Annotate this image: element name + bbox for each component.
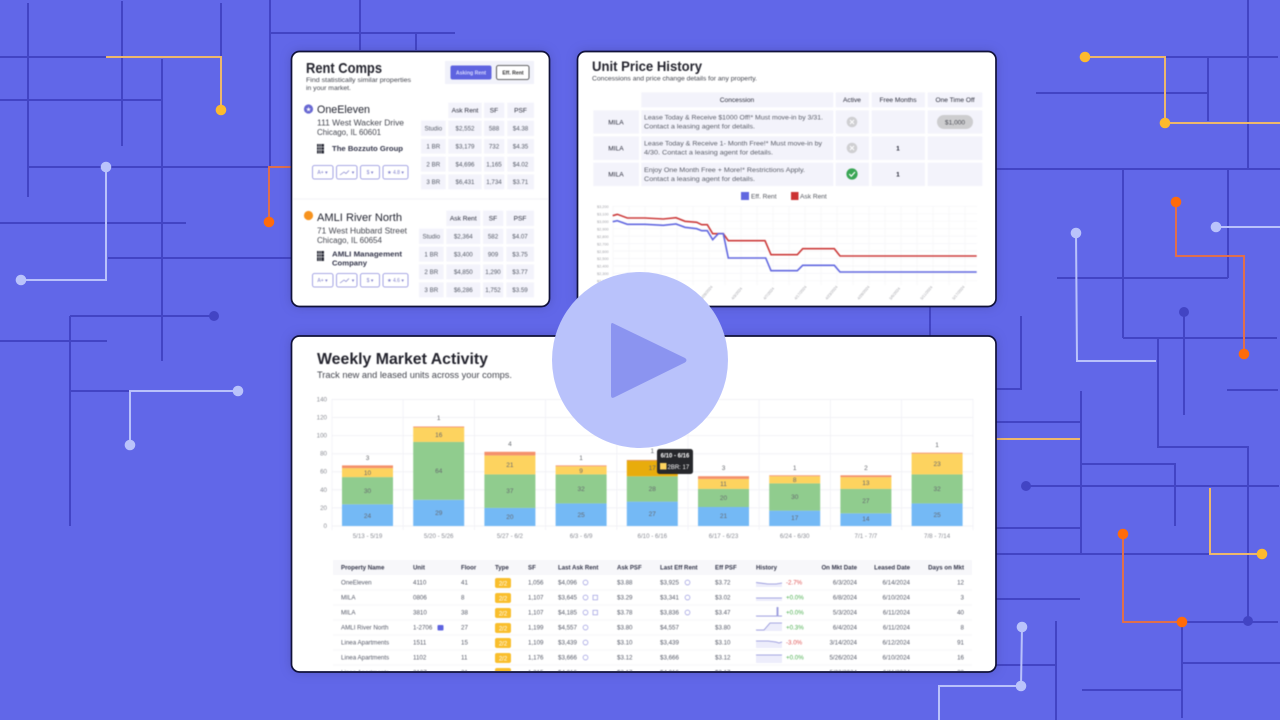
- table: concessions: Active: [843, 97, 861, 104]
- property: AMLI River North: $ ▾: [367, 278, 374, 284]
- yellow connector: top left: [106, 57, 226, 115]
- table header row: Type: [495, 564, 509, 572]
- table header row: Leased Date: [874, 564, 911, 572]
- property: AMLI River North: Chicago, IL 60654: [317, 236, 383, 245]
- bar value labels: 23: [933, 461, 941, 468]
- line chart: rent history: 4/3/2024: [731, 287, 743, 301]
- chart tooltip: [657, 449, 693, 474]
- stacked bar chart: weekly units: 120: [317, 414, 328, 422]
- table row text: $3,645: [558, 594, 577, 602]
- table row text: $4,185: [558, 610, 577, 616]
- bar value labels: 2: [864, 465, 868, 472]
- table row text: -2.7%: [786, 580, 803, 586]
- table row text: [341, 580, 965, 676]
- line chart: rent history: $2,800: [597, 235, 609, 239]
- table row text: 1102: [413, 654, 427, 662]
- table header row: On Mkt Date: [821, 564, 858, 572]
- table: OneEleven rents: 732: [489, 144, 500, 150]
- heading: weekly market activity: Weekly Market Activity: [317, 351, 488, 368]
- table row text: 0806: [413, 594, 427, 602]
- x axis week labels: 6/17 - 6/23: [709, 533, 739, 540]
- table type pills: [495, 578, 511, 678]
- chart legend: Eff. Rent: [751, 194, 777, 200]
- bar value labels: 32: [577, 486, 585, 493]
- table: concessions: Enjoy One Month Free + More!* Restrictions Apply.: [644, 167, 805, 174]
- table row text: $3,341: [660, 594, 679, 602]
- table: concessions: 4/30. Contact a leasing agent for details.: [644, 150, 773, 156]
- table: OneEleven rents: $4.38: [513, 126, 529, 132]
- table: concessions: MILA: [608, 146, 624, 152]
- line chart: rent history: $3,100: [597, 212, 609, 216]
- table row text: 91: [957, 640, 965, 646]
- light connector: bottom right: [939, 622, 1027, 720]
- bar value labels: 9: [579, 468, 583, 475]
- property: OneEleven: ★: [306, 105, 312, 113]
- table row text: Linea Apartments: [341, 670, 389, 676]
- stacked bar chart: weekly units: 80: [320, 451, 328, 458]
- table row text: $3,666: [660, 654, 679, 662]
- table type pill labels: 2/2: [499, 642, 508, 648]
- table: concessions: MILA: [608, 120, 624, 126]
- x axis week labels: 5/20 - 5/26: [424, 533, 454, 540]
- table: OneEleven rents: $3,179: [456, 144, 475, 150]
- table: OneEleven rents: SF: [490, 108, 498, 114]
- table: concessions: 1: [896, 146, 900, 152]
- table history icons: [583, 580, 690, 660]
- text: rent comps subtitle: in your market.: [306, 85, 351, 92]
- table: OneEleven rents: 1 BR: [426, 144, 441, 150]
- table row text: 40: [957, 610, 965, 616]
- x axis week labels: 7/1 - 7/7: [855, 533, 878, 540]
- table row text: 1,315: [528, 670, 544, 676]
- line chart: rent history: 5/6/2024: [889, 287, 901, 301]
- x axis week labels: 7/8 - 7/14: [924, 533, 951, 540]
- table: OneEleven rents: PSF: [514, 108, 527, 114]
- orange connector: left: [264, 167, 292, 227]
- line chart: rent history: $2,700: [597, 242, 609, 246]
- table row text: 3810: [413, 610, 427, 616]
- table: AMLI rents: 3 BR: [424, 287, 439, 294]
- line chart: rent history: $2,400: [597, 264, 609, 268]
- bar value labels: 28: [649, 486, 656, 493]
- property: OneEleven: $ ▾: [367, 170, 374, 176]
- table header row: Last Eff Rent: [660, 564, 698, 572]
- table row text: $3.12: [617, 654, 633, 662]
- line chart: rent history: $2,500: [597, 257, 609, 261]
- table row text: 8: [461, 594, 465, 602]
- table: concessions: Free Months: [879, 97, 917, 104]
- table: OneEleven rents: 3 BR: [426, 179, 441, 186]
- yellow connector: top right: [1080, 52, 1280, 128]
- table: OneEleven rents: $4.02: [513, 162, 529, 168]
- line chart: rent history: 4/17/2024: [794, 285, 808, 301]
- table row text: 1511: [413, 640, 427, 646]
- table: OneEleven rents: 2 BR: [426, 162, 441, 168]
- table type pill labels: 2/2: [499, 626, 508, 632]
- line chart: rent history: $3,000: [597, 220, 609, 224]
- property: OneEleven: [304, 104, 408, 179]
- table: OneEleven rents: $4,696: [456, 162, 475, 168]
- table row text: AMLI River North: [341, 624, 389, 632]
- table: leased units: [340, 564, 965, 671]
- heading: rent comps: Rent Comps: [306, 60, 382, 77]
- table header row: [341, 564, 964, 572]
- table: AMLI rents: Ask Rent: [450, 216, 477, 222]
- panel: unit price history: [578, 52, 996, 306]
- table header row: Property Name: [341, 564, 385, 572]
- bar value labels: 3: [366, 455, 370, 462]
- bar value labels: [364, 415, 941, 523]
- table row text: 1,176: [528, 654, 544, 662]
- table: AMLI rents: $3.77: [512, 269, 528, 276]
- bar value labels: 29: [435, 510, 443, 517]
- property: OneEleven: A+ ▾: [317, 170, 328, 176]
- table: AMLI rents: $4,850: [454, 269, 473, 276]
- table: AMLI rents: $3,400: [454, 252, 473, 258]
- table header row: Floor: [461, 564, 477, 572]
- bar value labels: 37: [506, 488, 514, 495]
- table row text: 6/10/2024: [882, 594, 911, 602]
- rent toggle buttons: Eff. Rent: [502, 70, 524, 76]
- table row text: 6/12/2024: [882, 640, 911, 646]
- property: OneEleven: ▾: [352, 170, 355, 176]
- table row text: +0.3%: [786, 624, 804, 632]
- table row text: 5/23/2024: [829, 670, 858, 676]
- table: AMLI rents: PSF: [514, 216, 526, 222]
- line chart: rent history: $2,900: [597, 228, 609, 232]
- orange connector: right: [1171, 197, 1249, 359]
- x axis week labels: 5/13 - 5/19: [353, 533, 383, 540]
- bar value labels: 3: [722, 465, 726, 472]
- table row text: 6/11/2024: [883, 610, 911, 616]
- table: concessions: MILA: [608, 172, 624, 178]
- property: AMLI River North: AMLI River North: [317, 212, 402, 224]
- table row text: $3.88: [617, 580, 633, 586]
- table: AMLI rents: $6,286: [454, 287, 473, 294]
- table row text: $4,096: [558, 580, 577, 586]
- yellow stub beside activity panel: [996, 438, 1080, 440]
- chart legend: Ask Rent: [800, 194, 827, 200]
- table row text: 1,107: [528, 610, 544, 616]
- bar value labels: 8: [793, 477, 797, 484]
- table row text: 41: [461, 580, 468, 586]
- table row text: $3.80: [617, 624, 633, 632]
- table row text: 1-2706: [413, 624, 433, 632]
- line chart: rent history: 5/17/2024: [952, 285, 966, 301]
- table row text: $3.29: [617, 594, 633, 602]
- table header row: Unit: [413, 564, 425, 572]
- table row text: +0.0%: [786, 654, 804, 662]
- yellow connector: lower right: [1210, 488, 1267, 559]
- rent toggle buttons: Asking Rent: [456, 70, 486, 76]
- table row text: 27: [461, 624, 468, 632]
- bar value labels: 10: [364, 470, 371, 477]
- table row text: 21: [461, 670, 468, 676]
- bar value labels: 1: [579, 455, 583, 462]
- light connector: right long: [1071, 228, 1156, 361]
- table row text: 6/11/2024: [883, 624, 911, 632]
- line chart: rent history: $2,600: [597, 250, 609, 254]
- orange connector: lower right: [1118, 529, 1187, 627]
- property: AMLI River North: ★ 4.6 ▾: [387, 278, 404, 284]
- table row text: 6/4/2024: [833, 624, 858, 632]
- x axis week labels: 6/24 - 6/30: [780, 533, 810, 540]
- bar value labels: 27: [649, 511, 656, 518]
- property: OneEleven: OneEleven: [317, 104, 370, 116]
- bar value labels: 64: [435, 468, 443, 475]
- bar value labels: 11: [720, 481, 727, 488]
- unit tag icon: [438, 625, 444, 630]
- table type pill labels: 2/2: [499, 596, 508, 602]
- table header row: Days on Mkt: [928, 564, 964, 572]
- table type pill labels: [499, 582, 508, 662]
- bar value labels: 1: [793, 465, 797, 472]
- bar value labels: 32: [933, 486, 941, 493]
- table row text: $4,557: [660, 624, 679, 632]
- table header row: SF: [528, 564, 536, 572]
- table row text: 1,107: [528, 594, 544, 602]
- bar value labels: 30: [364, 488, 371, 495]
- table row text: 2107: [413, 670, 427, 676]
- table row text: 1,199: [528, 624, 544, 632]
- stacked bar chart: weekly units: 140: [317, 396, 328, 404]
- table type pill labels: 2/2: [499, 582, 508, 588]
- table: concessions: Contact a leasing agent for details.: [644, 176, 755, 183]
- chart legend: [741, 192, 827, 200]
- table row text: 15: [461, 640, 468, 646]
- line chart: rent history: 4/7/2024: [763, 287, 775, 301]
- bar value labels: 21: [720, 513, 727, 520]
- table row text: $4,016: [660, 670, 679, 676]
- stacked bar chart: weekly units: 100: [317, 433, 328, 440]
- table type pill labels: 2/2: [499, 612, 508, 618]
- x axis week labels: 5/27 - 6/2: [497, 533, 524, 540]
- table: AMLI rents: 1,752: [485, 287, 501, 294]
- property: OneEleven: ★ 4.8 ▾: [387, 170, 404, 176]
- bar value labels: 1: [650, 448, 654, 455]
- text: weekly market subtitle: Track new and leased units across your comps.: [317, 370, 512, 380]
- table row text: $3.72: [715, 580, 731, 586]
- table: concessions: Contact a leasing agent for details.: [644, 124, 755, 130]
- table: concessions: Concession: [720, 97, 755, 104]
- bar value labels: 1: [935, 442, 939, 449]
- table: AMLI rents: $3.59: [512, 287, 528, 294]
- table row text: 1,109: [528, 640, 544, 646]
- bar value labels: 20: [720, 495, 727, 502]
- x axis week labels: 6/10 - 6/16: [638, 533, 668, 540]
- table: OneEleven rents: 1,734: [486, 179, 502, 186]
- table row text: 6/10/2024: [882, 654, 911, 662]
- table: AMLI rents: $3.75: [512, 252, 528, 258]
- table: OneEleven rents: [421, 103, 534, 189]
- line chart: rent history: [597, 205, 977, 301]
- chart tooltip: 2BR: 17: [668, 465, 690, 471]
- table header row: Eff PSF: [715, 564, 737, 572]
- heading: unit price history: Unit Price History: [592, 59, 702, 74]
- table row text: -3.0%: [786, 640, 803, 646]
- light connector: lower left: [125, 386, 243, 450]
- property: AMLI River North: [304, 211, 408, 287]
- table: AMLI rents: SF: [489, 216, 497, 222]
- text: unit price subtitle: Concessions and price change details for any property.: [592, 76, 757, 82]
- table row text: $3,439: [660, 640, 679, 646]
- line chart: rent history: 3/28/2024: [700, 285, 714, 301]
- line chart: rent history: 4/23/2024: [825, 285, 839, 301]
- table row text: $3.17: [617, 670, 633, 676]
- table row text: $4,557: [558, 624, 577, 632]
- table row text: 4110: [413, 580, 427, 586]
- table: concessions: One Time Off: [935, 97, 975, 104]
- table row text: $3.10: [617, 640, 633, 646]
- rent toggle buttons: [445, 61, 534, 84]
- table row text: 16: [957, 654, 965, 662]
- bar value labels: 16: [435, 432, 443, 439]
- table row text: Linea Apartments: [341, 654, 389, 662]
- line chart: rent history: 4/28/2024: [857, 285, 871, 301]
- table row text: 3/14/2024: [829, 640, 858, 646]
- table: OneEleven rents: $2,552: [456, 126, 475, 132]
- table header row: Last Ask Rent: [558, 564, 598, 572]
- bar value labels: 25: [577, 512, 585, 519]
- table: AMLI rents: 1,290: [485, 269, 501, 276]
- table: concessions: Lease Today & Receive 1- Month Free!* Must move-in by: [644, 141, 823, 148]
- table row text: 11: [461, 654, 468, 662]
- table row text: $4,016: [558, 670, 577, 676]
- table row text: $3,666: [558, 654, 577, 662]
- text: rent comps subtitle: [306, 77, 412, 92]
- table row text: 3: [961, 594, 965, 602]
- table: concessions: Lease Today & Receive $1000 Off!* Must move-in by 3/31.: [644, 115, 823, 122]
- bar value labels: 17: [791, 515, 799, 522]
- table row text: $3,925: [660, 580, 679, 586]
- stacked bar chart: weekly units: 40: [320, 487, 328, 494]
- line chart: rent history: $3,200: [597, 205, 609, 209]
- line chart: rent history: $2,300: [597, 272, 609, 276]
- table: concessions: $1,000: [945, 120, 965, 126]
- table: OneEleven rents: $3.71: [513, 179, 529, 186]
- table row text: $3.47: [715, 610, 731, 616]
- table history sparklines: [756, 582, 782, 663]
- play button: [552, 272, 728, 448]
- table: AMLI rents: 1 BR: [424, 252, 439, 258]
- x axis week labels: 6/3 - 6/9: [570, 533, 593, 540]
- table type pill labels: 2/2: [499, 656, 508, 662]
- table row text: $3.17: [715, 670, 731, 676]
- table row text: 6/8/2024: [833, 594, 858, 602]
- table row text: $3.80: [715, 624, 731, 632]
- table row text: 6/11/2024: [883, 670, 911, 676]
- property: AMLI River North: Company: [332, 260, 367, 268]
- table: AMLI rents: 909: [488, 252, 499, 258]
- panel: rent comps: [292, 52, 550, 306]
- table: OneEleven rents: $6,431: [456, 179, 475, 186]
- table: OneEleven rents: 588: [489, 126, 500, 132]
- property: OneEleven: Chicago, IL 60601: [317, 128, 382, 137]
- bars: [342, 426, 963, 526]
- table row text: OneEleven: [341, 580, 372, 586]
- table: AMLI rents: $4.07: [512, 234, 528, 240]
- table: AMLI rents: Studio: [423, 234, 441, 240]
- bar value labels: 17: [649, 465, 656, 472]
- table row text: 1,056: [528, 580, 544, 586]
- bar value labels: 21: [506, 462, 514, 469]
- bar value labels: 25: [933, 512, 941, 519]
- text: rent comps subtitle: Find statistically similar properties: [306, 77, 412, 84]
- chart tooltip: 6/10 - 6/16: [661, 454, 690, 460]
- property: OneEleven: The Bozzuto Group: [332, 146, 403, 153]
- table row text: $3,439: [558, 640, 577, 646]
- table row text: +0.0%: [786, 594, 804, 602]
- table: OneEleven rents: Ask Rent: [452, 108, 479, 114]
- table: OneEleven rents: $4.35: [513, 144, 529, 150]
- stacked bar chart: weekly units: [317, 396, 973, 540]
- line chart: rent history: 5/11/2024: [920, 285, 933, 301]
- table row text: 38: [461, 610, 468, 616]
- property: AMLI River North: AMLI Management: [332, 252, 403, 258]
- table row text: Linea Apartments: [341, 640, 389, 646]
- line chart: rent history: $2,200: [597, 280, 609, 284]
- table row text: MILA: [341, 610, 356, 616]
- stacked bar chart: weekly units: 0: [324, 523, 328, 530]
- table row text: 8: [961, 624, 965, 632]
- property: AMLI River North: 71 West Hubbard Street: [317, 226, 408, 236]
- stacked bar chart: weekly units: 60: [320, 469, 328, 476]
- table: AMLI rents: 582: [488, 234, 499, 240]
- table row text: $3,836: [660, 610, 679, 616]
- table row text: MILA: [341, 594, 356, 602]
- table row text: +0.0%: [786, 610, 804, 616]
- table row text: 5/26/2024: [829, 654, 858, 662]
- x axis week labels: [353, 533, 951, 540]
- light connector: upper left: [16, 162, 111, 285]
- bar value labels: 24: [364, 513, 371, 520]
- stacked bar chart: weekly units: 20: [320, 505, 328, 512]
- table: AMLI rents: 2 BR: [424, 269, 439, 276]
- table header row: History: [756, 564, 778, 572]
- table row text: 5/3/2024: [833, 610, 858, 616]
- bar value labels: 14: [862, 516, 870, 523]
- table row text: $3.10: [715, 640, 731, 646]
- table row text: $3.12: [715, 654, 731, 662]
- table: concessions: [593, 92, 982, 186]
- table: OneEleven rents: Studio: [425, 126, 443, 132]
- bar value labels: 30: [791, 494, 799, 501]
- table row text: 20: [957, 670, 965, 676]
- table: OneEleven rents: 1,165: [486, 162, 502, 168]
- table row text: $3.02: [715, 594, 731, 602]
- table: AMLI rents: [419, 211, 534, 297]
- table row text: 6/3/2024: [833, 580, 858, 586]
- property: AMLI River North: ▾: [352, 278, 355, 284]
- property: OneEleven: 111 West Wacker Drive: [317, 118, 405, 128]
- bar value labels: 4: [508, 441, 512, 448]
- bar value labels: 13: [862, 480, 870, 487]
- table: AMLI rents: $2,364: [454, 234, 473, 240]
- table header row: Ask PSF: [617, 564, 642, 572]
- property: AMLI River North: A+ ▾: [317, 278, 328, 284]
- table row text: 6/14/2024: [882, 580, 911, 586]
- table: concessions: 1: [896, 172, 900, 178]
- bar value labels: 1: [437, 415, 441, 422]
- light connector: right stub: [1211, 222, 1280, 232]
- bar value labels: 27: [862, 498, 870, 505]
- panel: weekly market activity: [292, 336, 996, 678]
- table row text: $3.78: [617, 610, 633, 616]
- table row text: 12: [957, 580, 965, 586]
- bar value labels: 20: [506, 514, 514, 521]
